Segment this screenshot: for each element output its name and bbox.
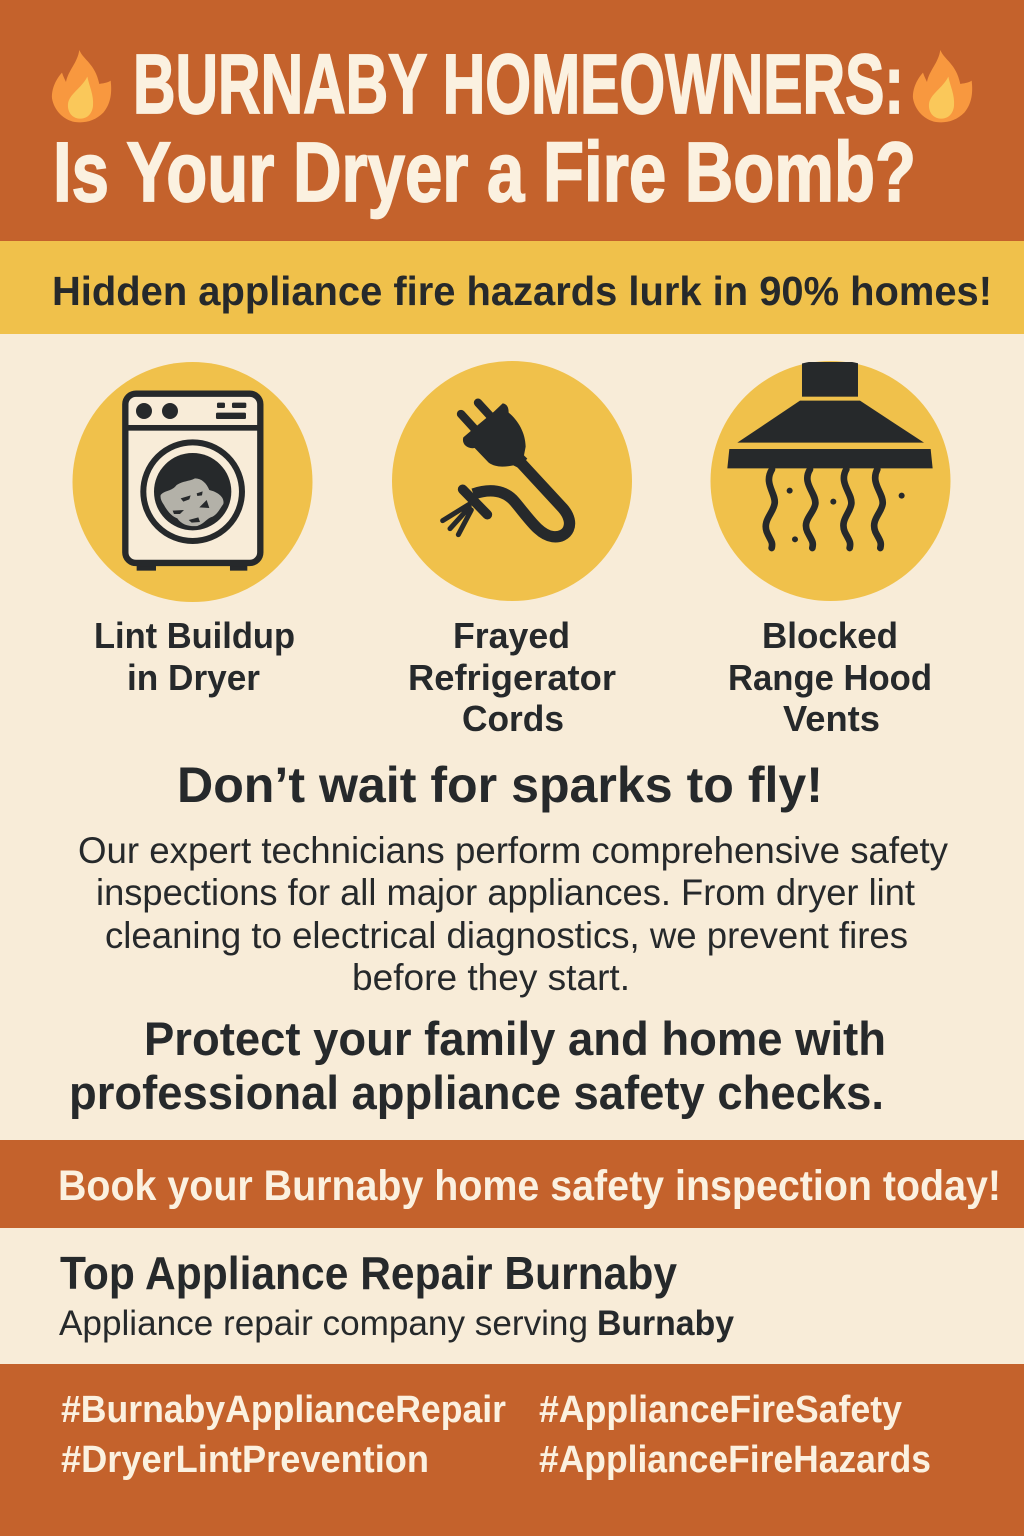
company block: Top Appliance Repair Burnaby (60, 1247, 677, 1299)
hashtags (61, 1389, 931, 1481)
body paragraph: cleaning to electrical diagnostics, we prevent fires (105, 915, 908, 956)
company block (59, 1247, 735, 1343)
company block: Burnaby (597, 1304, 735, 1343)
call to action banner (0, 1140, 1024, 1228)
subtitle text: Hidden appliance fire hazards lurk in 90% homes! (52, 268, 992, 314)
label: frayed refrigerator cords: Cords (462, 698, 564, 739)
label: lint buildup (94, 615, 295, 698)
body paragraph: before they start. (352, 957, 630, 998)
hashtag footer (0, 1364, 1024, 1536)
heading: don't wait: Don’t wait for sparks to fly! (177, 757, 823, 813)
icon: blocked range hood (710, 361, 950, 601)
hashtags: #BurnabyApplianceRepair (61, 1389, 506, 1431)
icon: left flame (52, 50, 111, 122)
header panel (0, 0, 1024, 241)
hashtags: #ApplianceFireSafety (539, 1389, 902, 1431)
subtitle banner (0, 241, 1024, 334)
icon: frayed cord plug (392, 361, 632, 601)
statement: protect your family (69, 1012, 886, 1119)
statement: protect your family: professional appliance safety checks. (69, 1066, 884, 1119)
body paragraph (78, 830, 948, 998)
hashtags: #DryerLintPrevention (61, 1439, 429, 1481)
label: frayed refrigerator cords: Frayed (453, 615, 570, 656)
hashtags: #ApplianceFireHazards (539, 1439, 931, 1481)
label: lint buildup: in Dryer (127, 657, 260, 698)
body paragraph: inspections for all major appliances. From dryer lint (96, 872, 916, 913)
statement: protect your family: Protect your family and home with (144, 1012, 886, 1065)
body paragraph: Our expert technicians perform comprehensive safety (78, 830, 948, 871)
label: frayed refrigerator cords: Refrigerator (408, 657, 616, 698)
label: frayed refrigerator cords (408, 615, 616, 739)
label: blocked range hood vents (728, 615, 932, 739)
label: lint buildup: Lint Buildup (94, 615, 295, 656)
label: blocked range hood vents: Vents (783, 698, 880, 739)
icon: dryer with lint (72, 362, 312, 602)
label: blocked range hood vents: Range Hood (728, 657, 932, 698)
company block: Appliance repair company serving (59, 1304, 588, 1343)
icon: right flame (913, 50, 972, 122)
label: blocked range hood vents: Blocked (762, 615, 898, 656)
